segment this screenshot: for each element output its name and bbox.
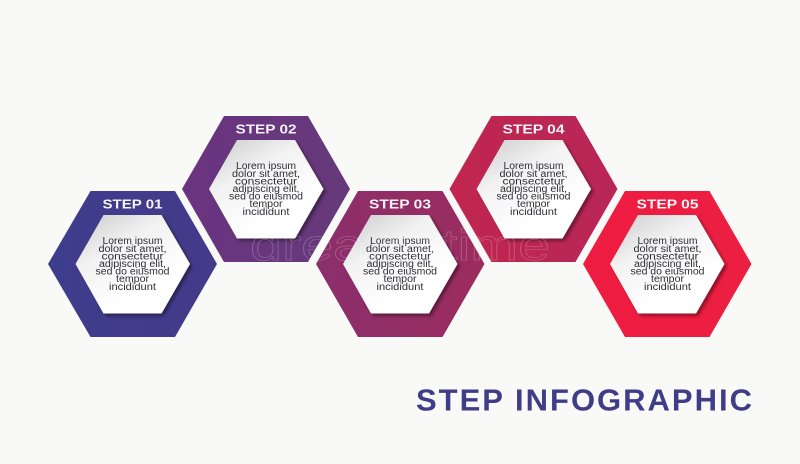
body text 03: sed do eiusmod [363,266,437,278]
watermark: dreamstime [250,221,550,270]
outer hexagon 04 [450,116,618,262]
inner hexagon 01 [76,215,190,314]
label 02: STEP 02 [236,122,296,136]
body text 02: sed do eiusmod [229,192,303,202]
body text 01 [96,236,170,293]
body text 01: Lorem ipsum [102,236,162,247]
body text 03: consectetur [369,252,432,262]
step 03 hexagon [316,191,484,337]
step 05 hexagon [583,191,752,337]
body text 04: tempor [517,199,551,210]
body text 05 [630,236,704,293]
body text 02: incididunt [242,207,290,218]
step 04 hexagon [450,116,618,262]
body text 03: incididunt [376,282,424,293]
body text 01: dolor sit amet, [98,244,166,255]
body text 04: Lorem ipsum [504,161,564,172]
body text 05: adipiscing elit, [634,259,701,270]
body text 04: consectetur [502,176,565,188]
outer hexagon 02 [182,116,350,262]
body text 05: sed do eiusmod [630,266,704,278]
body text 02: consectetur [235,176,298,188]
label 01: STEP 01 [102,196,162,212]
body text 02 [229,161,303,218]
body text 05: consectetur [636,252,699,262]
inner hexagon 02 [209,140,324,238]
label 03: STEP 03 [369,196,431,212]
title: STEP INFOGRAPHIC [416,382,752,418]
body text 02: tempor [250,199,283,210]
inner hexagon 05 [610,215,724,314]
body text 01: consectetur [102,252,164,262]
body text 04: dolor sit amet, [500,169,568,180]
label 05: STEP 05 [636,196,698,212]
body text 01: sed do eiusmod [96,266,170,278]
outer hexagon 03 [316,191,484,337]
body text 04: sed do eiusmod [496,192,570,202]
label 04: STEP 04 [502,122,565,136]
body text 03: Lorem ipsum [370,236,430,247]
inner hexagon 03 [343,215,458,314]
inner hexagon 04 [476,140,591,238]
body text 04: adipiscing elit, [500,184,567,195]
outer hexagon 01 [48,191,217,337]
body text 01: incididunt [109,282,156,293]
step 02 hexagon [182,116,350,262]
body text 05: dolor sit amet, [634,244,702,255]
body text 02: adipiscing elit, [232,184,300,195]
step 01 hexagon [48,191,217,337]
outer hexagon 05 [583,191,752,337]
body text 01: tempor [116,274,150,285]
body text 04 [496,161,570,218]
body text 02: dolor sit amet, [232,169,300,180]
body text 03: tempor [384,274,417,285]
body text 03: adipiscing elit, [366,259,434,270]
body text 05: incididunt [644,282,691,293]
body text 01: adipiscing elit, [99,259,166,270]
body text 02: Lorem ipsum [236,161,296,172]
body text 03 [363,236,437,293]
body text 05: Lorem ipsum [638,236,698,247]
body text 04: incididunt [510,207,557,218]
body text 05: tempor [651,274,685,285]
body text 03: dolor sit amet, [366,244,434,255]
